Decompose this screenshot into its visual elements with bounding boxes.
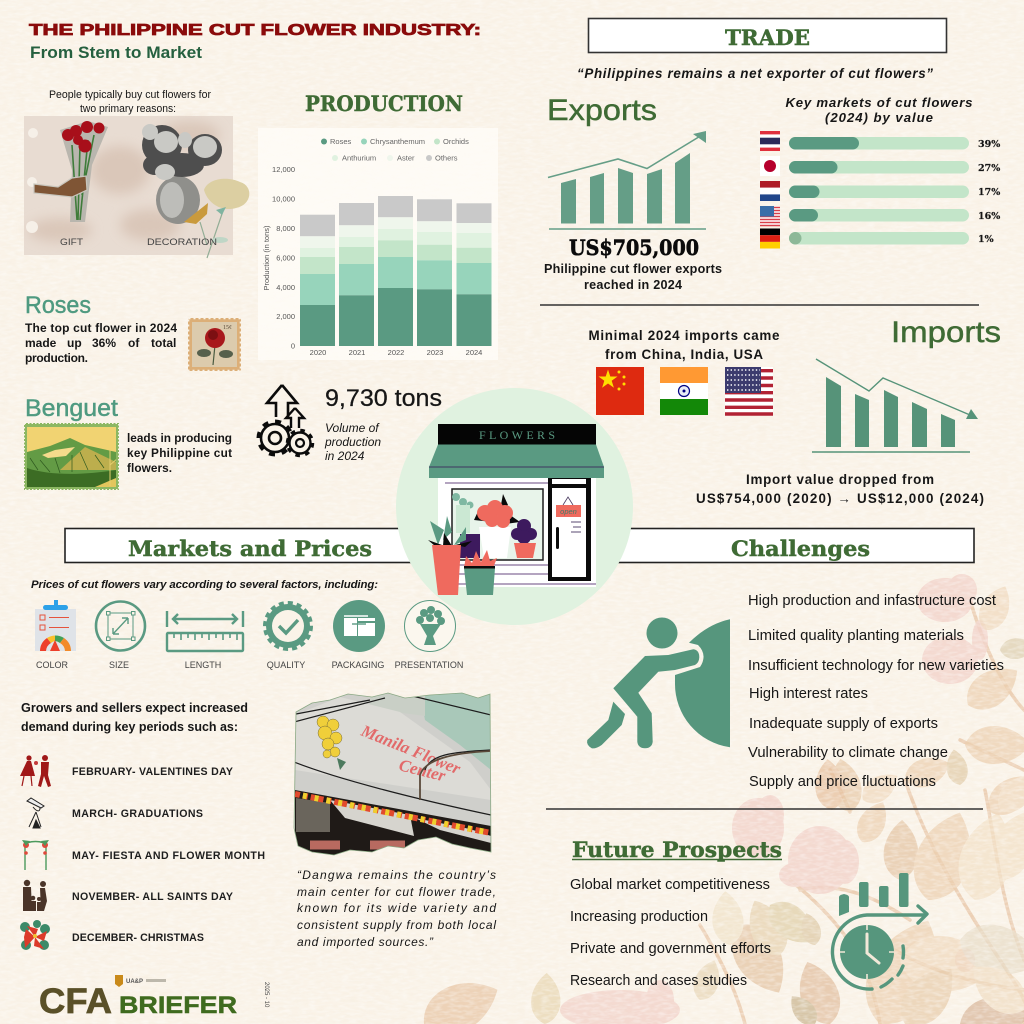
label: size: SIZE (109, 660, 129, 670)
list: challenges: Vulnerability to climate change (748, 745, 948, 761)
chart axis labels: 2022 (388, 348, 404, 357)
heading: key markets: (2024) by value (825, 110, 933, 125)
list: key demand periods (20, 755, 265, 950)
logo: UA&P (115, 975, 166, 987)
chart axis labels: 2021 (349, 348, 365, 357)
text: benguet (127, 431, 232, 475)
header box: markets and prices / challenges (65, 528, 974, 562)
text: price factors: Prices of cut flowers vary according to several factors, including: (31, 579, 378, 591)
list: future prospects: Global market competitiveness (570, 877, 770, 893)
bar: Germany 1% (789, 232, 994, 245)
chart icon: imports falling (812, 359, 978, 452)
quote: Dangwa (297, 868, 496, 949)
text: roses share: production. (25, 351, 88, 365)
bar: USA 16% (789, 209, 1000, 222)
label: color: COLOR (36, 660, 68, 670)
bars 2023 (417, 199, 452, 346)
stacked bar chart: production in tons (258, 128, 498, 360)
list: future prospects: Research and cases studies (570, 973, 747, 989)
text: demand periods intro: Growers and sellers expect increased (21, 700, 248, 715)
logo: CFA Briefer: CFA (39, 982, 112, 1021)
stat: export value: Philippine cut flower exports (544, 262, 722, 276)
text: roses share (25, 321, 177, 365)
heading: roses: Roses (25, 292, 91, 319)
chart axis labels: 0 (291, 342, 295, 350)
text: benguet: flowers. (127, 461, 172, 475)
chart axis labels: Production (in tons) (262, 225, 271, 291)
icon: flower arch (22, 840, 49, 870)
text: roses share: 36% (92, 336, 116, 350)
image panel: gift and decoration (24, 116, 249, 258)
icon: poinsettia (20, 920, 50, 950)
text: roses share: up (67, 336, 82, 350)
list: challenges: Supply and price fluctuations (749, 774, 936, 790)
flag: Netherlands (760, 181, 780, 201)
quote: Dangwa: and imported sources.” (297, 935, 434, 949)
icon: presentation bouquet (404, 600, 456, 652)
text: import drop (696, 472, 984, 506)
text: demand periods intro (21, 700, 248, 734)
bar: USA 16%: 16% (978, 211, 1000, 222)
icon: quality badge (265, 603, 311, 649)
text: import drop: Import value dropped from (746, 472, 934, 487)
list: challenges: High interest rates (749, 686, 868, 702)
text: demand periods intro: demand during key periods such as: (21, 719, 238, 734)
stat: export value: US$705,000 (569, 235, 699, 260)
chart axis labels: 10,000 (272, 194, 295, 204)
icon: family (23, 880, 47, 911)
bar: Japan 27% (789, 161, 1000, 174)
intro text: reasons to buy: two primary reasons: (80, 103, 176, 115)
list: challenges: Inadequate supply of exports (749, 716, 938, 732)
chart axis labels: 2020 (310, 348, 326, 357)
flag: Germany (760, 228, 780, 248)
label: gift: GIFT (60, 237, 84, 247)
text: import sources: from China, India, USA (605, 347, 763, 362)
chart legend: Orchids (443, 137, 469, 146)
label: quality: QUALITY (267, 660, 305, 670)
photo: Manila Flower Center, Dangwa (294, 693, 491, 855)
text: roses share: total (151, 336, 176, 350)
list: future prospects (570, 877, 771, 989)
label: length: LENGTH (185, 660, 221, 670)
chart axis labels (262, 165, 482, 357)
label: february: FEBRUARY- VALENTINES DAY (72, 766, 233, 778)
bar: Japan 27%: 27% (978, 163, 1000, 174)
shop sign: FLOWERS (479, 428, 555, 442)
text: import sources (588, 328, 780, 362)
heading: challenges: Challenges (731, 536, 870, 561)
icon: valentine couple (20, 755, 51, 787)
text: import sources: Minimal 2024 imports came (588, 328, 780, 343)
logo: CFA Briefer: BRIEFER (119, 992, 237, 1019)
label: march: MARCH- GRADUATIONS (72, 808, 203, 820)
flag: Japan (760, 156, 780, 176)
list: future prospects: Private and government efforts (570, 941, 771, 957)
flag: United States (725, 367, 773, 415)
icon: arrows and gears (258, 385, 312, 456)
chart axis labels: 4,000 (276, 283, 295, 292)
icon: clock with growth bars (832, 873, 927, 989)
intro text: reasons to buy (49, 89, 211, 115)
icon: person pushing boulder (587, 618, 730, 748)
icon: rose stamp: 15¢ (223, 325, 232, 331)
list: challenges: Limited quality planting materials (748, 628, 964, 644)
text: benguet: leads in producing (127, 431, 232, 445)
title: THE PHILIPPINE CUT FLOWER INDUSTRY: (29, 22, 481, 39)
bar: Netherlands 17%: 17% (978, 187, 1000, 198)
logo: CFA Briefer (39, 975, 237, 1021)
stat: volume of production: Volume of (325, 421, 380, 435)
watercolor floral background (414, 574, 1024, 1024)
flag: China (596, 367, 644, 415)
text: import drop: US$754,000 (2020) → US$12,000 (2024) (696, 491, 984, 506)
text: benguet: key Philippine cut (127, 446, 232, 460)
icon: benguet landscape stamp (24, 423, 119, 490)
chart legend: Others (435, 154, 458, 162)
chart icon: exports rising (548, 131, 706, 229)
stat: volume of production: in 2024 (325, 449, 365, 463)
quote: Dangwa: consistent supply from both local (297, 918, 496, 932)
awning (429, 444, 604, 478)
icon: graduate (27, 798, 44, 828)
chart legend (321, 137, 469, 162)
list: challenges (748, 593, 1004, 790)
stat: volume of production: production (324, 435, 381, 449)
intro text: reasons to buy: People typically buy cut flowers for (49, 89, 211, 101)
bars 2022 (378, 196, 413, 346)
header box: trade: TRADE (725, 25, 810, 50)
chart legend: Chrysanthemum (370, 137, 425, 146)
shop sign (438, 424, 596, 444)
potted plant left (428, 516, 472, 595)
door (548, 478, 591, 581)
heading: key markets: Key markets of cut flowers (786, 95, 972, 110)
text: roses share: The top cut flower in 2024 (25, 321, 177, 335)
quote: Dangwa: “Dangwa remains the country’s (297, 868, 496, 882)
icon: decoration vase (142, 124, 249, 258)
flag: Thailand (760, 131, 780, 151)
storefront illustration (396, 388, 633, 625)
chart legend: Roses (330, 137, 352, 146)
bar: Thailand 39% (789, 137, 1000, 150)
label: november: NOVEMBER- ALL SAINTS DAY (72, 891, 233, 903)
logo: UA&P: UA&P (126, 979, 143, 985)
chart axis labels: 12,000 (272, 165, 295, 174)
chart legend: Aster (397, 154, 415, 162)
chart axis labels: 2,000 (276, 312, 295, 321)
bar: Netherlands 17% (789, 186, 1000, 198)
chart axis labels: 2023 (427, 348, 443, 357)
flag: United States (760, 206, 780, 226)
stat: export value (544, 235, 722, 292)
label: december: DECEMBER- CHRISTMAS (72, 932, 204, 944)
title (29, 22, 481, 62)
chart legend: Anthurium (342, 154, 376, 162)
label: decoration: DECORATION (147, 237, 217, 247)
icon: color clipboard (35, 600, 76, 651)
price factor icons (35, 600, 463, 670)
text: roses share: made (25, 336, 57, 350)
quote: Dangwa: main center for cut flower trade, (297, 885, 496, 899)
block: benguet (24, 395, 232, 490)
icon: packaging (333, 600, 385, 652)
heading: benguet: Benguet (25, 395, 118, 422)
stat: volume of production: 9,730 tons (325, 385, 442, 412)
bars 2020 (300, 215, 335, 346)
label: may: MAY- FIESTA AND FLOWER MONTH (72, 850, 265, 862)
door: open (560, 507, 577, 516)
chart axis labels: 8,000 (276, 224, 295, 233)
icon: length ruler (167, 611, 243, 651)
icon: size (96, 602, 145, 650)
stat: volume of production (324, 385, 442, 463)
stat: export value: reached in 2024 (584, 278, 682, 292)
heading: exports: Exports (547, 94, 657, 127)
window plants (452, 493, 537, 558)
text: roses share: of (128, 336, 140, 350)
edition label: 2025 - 10 (263, 982, 269, 1008)
heading: future prospects: Future Prospects (572, 838, 782, 863)
chart axis labels: 2024 (466, 348, 482, 357)
bar: Thailand 39%: 39% (978, 139, 1000, 150)
heading: key markets (786, 95, 972, 125)
potted plant right (464, 550, 497, 595)
photo: Manila Flower Center, Dangwa: Manila Flower (358, 721, 464, 778)
list: challenges: High production and infastructure cost (748, 593, 996, 609)
chart axis labels: 6,000 (276, 254, 295, 262)
heading: production: PRODUCTION (305, 91, 463, 116)
photo: Manila Flower Center, Dangwa: Center (397, 755, 448, 785)
bars 2021 (339, 203, 374, 346)
quote: Dangwa: known for its wide variety and (297, 901, 496, 915)
label: presentation: PRESENTATION (395, 660, 463, 670)
bars 2024 (456, 203, 492, 346)
header box: trade (588, 18, 946, 52)
list: challenges: Insufficient technology for new varieties (748, 658, 1004, 674)
flag: India (660, 367, 708, 415)
block: roses (25, 292, 241, 371)
trade quote: “Philippines remains a net exporter of cut flowers” (577, 66, 933, 81)
heading: imports: Imports (891, 316, 1001, 349)
label: packaging: PACKAGING (332, 660, 384, 670)
key markets bar list (760, 131, 1000, 248)
title: From Stem to Market (30, 43, 202, 62)
list: future prospects: Increasing production (570, 909, 708, 925)
icon: rose stamp (188, 318, 241, 371)
icon: gift bouquet (34, 121, 108, 222)
bar: Germany 1%: 1% (978, 234, 994, 245)
heading: markets and prices: Markets and Prices (128, 536, 372, 561)
